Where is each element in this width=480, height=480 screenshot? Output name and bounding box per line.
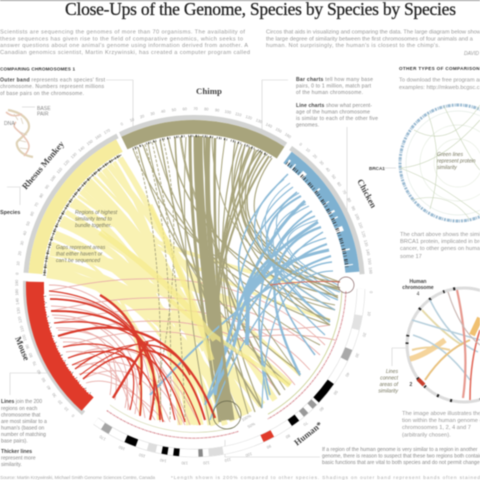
- tick labels: mouse: 40: [45, 384, 52, 391]
- tick labels: rhesus: 170: [103, 127, 112, 135]
- tick labels: human: 60: [318, 406, 325, 413]
- note: species: Species: [0, 210, 20, 216]
- ribbons: red to right: [270, 281, 340, 285]
- species label: human: Human*: [292, 419, 325, 448]
- tick labels: human: 50: [332, 390, 339, 397]
- tick labels: chimp: 50: [171, 107, 177, 112]
- tick labels: rhesus: 110: [55, 166, 64, 174]
- chart: chromosome duplication circos: [407, 288, 480, 402]
- tick labels: human: 40: [344, 372, 351, 379]
- text: BRCA1 caption: some 17: [400, 254, 422, 260]
- text: duplication caption: (arbitrarily chosen).: [402, 432, 451, 438]
- tick labels: mouse: 100: [21, 333, 28, 342]
- tick labels: chimp: 150: [275, 126, 283, 134]
- tick labels: mouse: 90: [24, 343, 30, 350]
- note: bar charts: of the human chromosome.: [296, 90, 363, 96]
- chart: mouse line: [45, 294, 90, 393]
- tick labels: human: 20: [361, 332, 368, 338]
- tick labels: rhesus: [14, 127, 112, 275]
- tick labels: mouse: 60: [35, 368, 42, 375]
- tick labels: chicken: 20: [312, 153, 319, 160]
- tick labels: rhesus: 60: [29, 210, 35, 217]
- tick labels: human: 130: [181, 461, 188, 466]
- icon: DNA helix: [6, 110, 33, 157]
- tick labels: chimp: 40: [161, 108, 167, 114]
- annotation: lines connect: Lines: [386, 369, 398, 375]
- tick labels: human: [98, 291, 374, 466]
- tick labels: chimp: 110: [235, 111, 243, 118]
- annotation: gaps: that either haven't or: [56, 252, 103, 258]
- annotation: green lines: represent protein: [437, 158, 476, 164]
- tick labels: chicken: 10: [305, 147, 312, 154]
- tick labels: chimp: 160: [284, 132, 293, 140]
- tick labels: human: 30: [354, 352, 361, 359]
- note: outer band: Outer band represents each species' first: [0, 78, 106, 84]
- highlight circle: line chart: [213, 401, 241, 429]
- tick labels: rhesus: 30: [19, 240, 25, 246]
- annotation: lines connect: areas of: [380, 382, 399, 388]
- tick labels: chicken: 150: [367, 258, 373, 266]
- tick labels: chicken: 90: [350, 205, 357, 212]
- callout: lines join: human's (based on: [1, 426, 44, 432]
- ribbons: mouse red: [49, 291, 215, 425]
- tick labels: chicken: 30: [318, 159, 326, 167]
- tick labels: rhesus: 0: [14, 272, 20, 275]
- tick labels: human: 100: [244, 451, 253, 458]
- tick labels: mouse: 0: [70, 413, 75, 418]
- tick labels: chimp: 90: [215, 107, 220, 113]
- annotation: gaps: can't be sequenced: [56, 258, 100, 264]
- callout: lines join: Lines join the 200: [1, 399, 42, 405]
- note: bar charts: Bar charts tell how many base: [296, 77, 373, 83]
- annotation: gaps: [56, 245, 106, 264]
- callout: lines join: chromosome that: [1, 412, 41, 418]
- annotation: regions bundle: similarity tend to: [75, 216, 112, 222]
- note: outer band: chromosome. Numbers represent millions: [0, 84, 104, 90]
- intro text right: DAVID: [464, 51, 479, 57]
- chart: chimp line: [133, 136, 271, 157]
- label: BRCA1: BRCA1: [369, 166, 385, 171]
- tick labels: mouse: 70: [31, 360, 38, 367]
- note: bar charts: pairs, 0 to 1 million, match part: [296, 84, 372, 90]
- intro text right: the large degree of similarity between the first chromosomes of four animals and a: [266, 36, 474, 42]
- tick labels: chimp: 70: [193, 106, 199, 111]
- tick labels: chicken: 40: [325, 166, 332, 173]
- label: percent scale: 100%: [241, 413, 252, 422]
- ribbons: olive over blue: [215, 138, 338, 416]
- tick labels: chicken: 100: [354, 213, 361, 221]
- band: chicken: [288, 157, 352, 272]
- annotation: green lines: Green lines: [437, 152, 464, 158]
- text: BRCA1 caption: [400, 232, 480, 260]
- tick labels: chimp: 60: [182, 106, 188, 111]
- tick labels: chicken: 130: [363, 239, 370, 248]
- annotation: regions bundle: [75, 210, 118, 229]
- tick labels: rhesus: 90: [44, 183, 51, 190]
- note: line charts: age of the human chromosome: [296, 110, 370, 116]
- label: chromosome 2: 2: [410, 382, 412, 388]
- ribbons: rhesus yellow: [47, 158, 330, 425]
- tick labels: chimp: 0: [120, 121, 125, 127]
- label: human chromosome: 4: [417, 292, 420, 298]
- annotation: green lines: [437, 152, 476, 171]
- callout: lines join: are most similar to a: [1, 419, 47, 425]
- tick labels: chimp: 20: [139, 113, 146, 119]
- tick labels: mouse: 80: [27, 352, 34, 358]
- leader lines: [7, 80, 408, 457]
- species label: mouse: Mouse: [13, 335, 32, 362]
- tick labels: human: 80: [284, 433, 291, 440]
- ribbons: chimp olive: [133, 136, 340, 425]
- label: human chromosome: chromosome: [402, 285, 434, 291]
- callout: lines join: base pairs).: [1, 438, 28, 444]
- chart: mouse histogram edge: [45, 294, 90, 393]
- intro text left: answer questions about one animal's genome using information derived from another. A: [0, 43, 248, 49]
- tick labels: chicken: 120: [360, 230, 367, 239]
- chart: rhesus line: [44, 155, 121, 276]
- label: human chromosome: [402, 279, 434, 298]
- tick labels: chicken: [298, 142, 374, 275]
- annotation: regions bundle: Regions of highest: [75, 210, 118, 216]
- band: chimp: [124, 127, 281, 153]
- label: human chromosome: Human: [410, 279, 426, 285]
- tick labels: mouse: 190: [14, 279, 19, 286]
- callout: human genome region: If a region of the human genome is very similar to a region in another: [322, 447, 478, 453]
- callout: lines join: number of matching: [1, 432, 46, 438]
- tick labels: chimp: 100: [224, 109, 232, 115]
- annotation: gaps: Gaps represent areas: [56, 245, 106, 251]
- tick labels: human: 90: [265, 444, 272, 450]
- tick labels: human: 140: [159, 458, 167, 464]
- tick labels: human: 0: [369, 291, 374, 294]
- callout: lines join: regions on each: [1, 406, 37, 412]
- label: percent scale: [241, 413, 256, 429]
- tick labels: human: 150: [137, 452, 146, 459]
- text: duplication caption: [402, 411, 480, 438]
- label: DNA: DNA: [4, 121, 15, 127]
- tick labels: mouse: 10: [62, 405, 70, 413]
- callout: thicker lines: [1, 449, 36, 468]
- annotation: green lines: similarity: [437, 165, 457, 171]
- intro text left: [0, 30, 250, 56]
- tick labels: chimp: 140: [265, 121, 274, 129]
- note: line charts: is similar to each of the other five: [296, 116, 378, 122]
- callout: thicker lines: Thicker lines: [1, 449, 32, 455]
- tick labels: chimp: 10: [129, 116, 136, 123]
- annotation: lines connect: connect: [380, 376, 399, 382]
- tick labels: mouse: 30: [50, 391, 57, 399]
- tick labels: chicken: 70: [341, 189, 348, 196]
- tick labels: human: 120: [202, 460, 210, 466]
- tick labels: mouse: 180: [14, 288, 19, 296]
- callout: human genome region: basic functions that are vital to both species and do not permit change.: [322, 460, 480, 466]
- tick labels: human: 160: [117, 444, 126, 452]
- panel: outer grey bands: [26, 117, 362, 413]
- tick labels: rhesus: 160: [94, 132, 103, 140]
- callout: thicker lines: represent more: [1, 456, 36, 462]
- tick labels: rhesus: 120: [62, 158, 71, 167]
- chart: rhesus line thin: [44, 155, 121, 276]
- callout: human genome region: genome, there is reason to suspect that these two regions both contain: [322, 454, 480, 460]
- tick labels: mouse: [14, 279, 75, 418]
- ribbons: mouse pale: [49, 279, 335, 425]
- tick labels: mouse: 20: [56, 399, 63, 406]
- tick labels: rhesus: 20: [17, 250, 23, 256]
- tick labels: chimp: [120, 106, 293, 140]
- band: mouse: [35, 282, 88, 404]
- tick labels: chicken: 80: [346, 197, 353, 204]
- tick labels: human: 70: [302, 421, 309, 428]
- label: base pair: [37, 106, 51, 118]
- tick labels: chicken: 140: [365, 248, 371, 257]
- tick labels: chicken: 110: [357, 222, 364, 230]
- label: percent scale: 50%: [247, 421, 256, 429]
- note: outer band: [0, 78, 106, 97]
- intro text left: Canadian genomics scientist, Martin Krzywinski, has created a computer program called: [0, 50, 250, 56]
- callout: lines join: [1, 399, 47, 444]
- callout: thicker lines: similarity.: [1, 462, 22, 468]
- tick labels: rhesus: 40: [21, 230, 28, 236]
- tick labels: rhesus: 10: [15, 260, 21, 266]
- tick labels: chicken: 50: [331, 173, 338, 181]
- tick labels: rhesus: 80: [38, 192, 45, 199]
- species label: chimp: Chimp: [196, 86, 222, 96]
- band: rhesus: [36, 146, 119, 274]
- note: bar charts: [296, 77, 373, 96]
- tick labels: rhesus: 130: [70, 151, 78, 160]
- tick labels: mouse: 130: [15, 306, 21, 314]
- human line charts: [107, 291, 346, 438]
- ribbons: yellow over olive: [100, 205, 290, 385]
- tick labels: chicken: 0: [298, 142, 304, 147]
- annotation: lines connect: similarity: [378, 388, 398, 394]
- label: base pair: PAIR: [37, 112, 49, 118]
- ribbons: main diagram: [47, 136, 340, 425]
- intro text left: Scientists are sequencing the genomes of more than 70 organisms. The availability of: [0, 30, 245, 36]
- heading: comparing chromosomes: COMPARING CHROMOSOMES 1: [0, 66, 75, 72]
- chart: chicken line: [287, 163, 347, 270]
- tick labels: chicken: 160: [368, 267, 374, 275]
- tick labels: rhesus: 100: [49, 174, 57, 183]
- text: duplication caption: chromosomes 1, 2, 4 and 7: [402, 425, 471, 431]
- tick labels: human: 170: [98, 434, 107, 442]
- intro text right: [266, 30, 480, 57]
- label: base pair: BASE: [37, 106, 51, 112]
- note: download: [399, 78, 480, 91]
- tick labels: chimp: 30: [150, 110, 156, 116]
- note: line charts: Line charts show what percent-: [296, 103, 372, 109]
- annotation: lines connect: [378, 369, 399, 394]
- tick labels: chimp: 130: [255, 117, 264, 125]
- chart: chicken gaps: [287, 163, 349, 269]
- note: line charts: genomes.: [296, 122, 319, 128]
- species label: rhesus monkey: Rhesus Monkey: [20, 139, 66, 191]
- tick labels: mouse: 120: [17, 315, 23, 324]
- callout: human genome region: [322, 447, 480, 466]
- tick labels: human: 10: [366, 311, 372, 317]
- tick labels: chimp: 120: [245, 114, 254, 121]
- highlight circle: bar chart: [338, 277, 354, 293]
- species label: chicken: Chicken: [355, 177, 379, 210]
- note: outer band: of base pairs on the chromosome.: [0, 91, 84, 97]
- tick labels: rhesus: 50: [25, 220, 31, 226]
- tick labels: mouse: 140: [14, 297, 20, 305]
- tick labels: rhesus: 70: [33, 201, 40, 208]
- tick labels: rhesus: 140: [77, 144, 86, 153]
- tick labels: chimp: 80: [204, 106, 210, 112]
- tick labels: chicken: 60: [336, 181, 343, 188]
- intro text left: these sequences has given rise to the field of comparative genomics, which seeks to: [0, 36, 243, 42]
- ribbons: chicken blue: [150, 174, 340, 420]
- tick labels: human: 110: [224, 457, 231, 463]
- tick labels: mouse: 50: [40, 376, 47, 383]
- intro text right: human. Not surprisingly, the human's is closest to the chimp's.: [266, 43, 440, 49]
- tick labels: mouse: 110: [18, 325, 25, 333]
- intro text right: Circos that aids in visualizing and comparing the data. The large diagram below shows: [266, 30, 480, 36]
- annotation: regions bundle: bundle together.: [75, 223, 112, 229]
- note: line charts: [296, 103, 378, 128]
- human chromosome band: [96, 289, 361, 453]
- tick labels: rhesus: 150: [86, 138, 94, 146]
- chart: BRCA1 circos: [397, 105, 480, 221]
